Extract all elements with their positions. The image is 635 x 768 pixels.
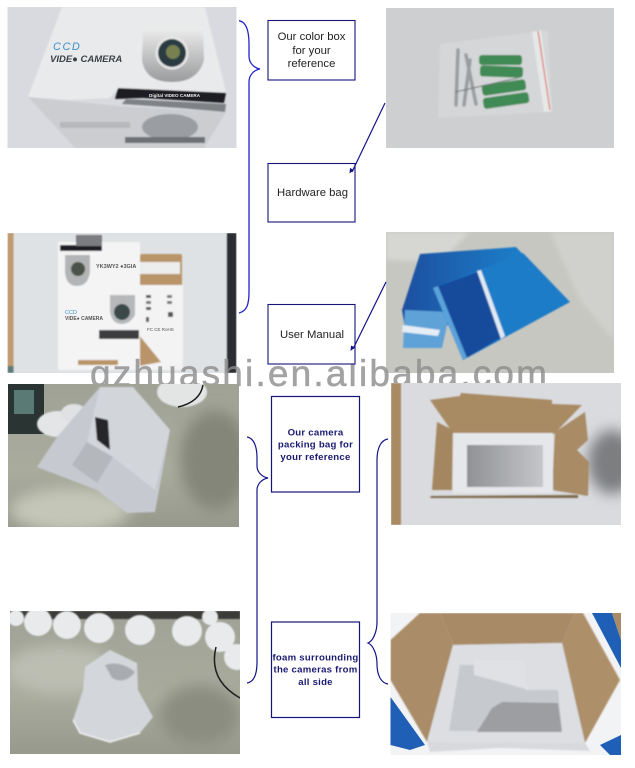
callout text: Hardware bag [277, 187, 348, 199]
photo: camera in packing bag [8, 384, 239, 527]
callout: user manual [268, 304, 355, 364]
callout: our color box [268, 20, 355, 80]
callout text: User Manual [280, 329, 344, 341]
photo: hardware bag [386, 8, 614, 148]
photo: carton with foam, long view [391, 383, 635, 525]
callout text: for your [292, 45, 331, 57]
callout text: all side [298, 677, 333, 688]
box label: digital video camera: Digital VIDEO CAMERA [149, 93, 201, 98]
callout text: foam surrounding [272, 652, 359, 664]
brace: color box and manuals [239, 21, 260, 313]
box label: CCD: CCD [53, 41, 81, 53]
carton mark: logo: CCD [65, 310, 77, 316]
carton mark: video camera: VIDE● CAMERA [65, 316, 103, 322]
callout text: your reference [280, 452, 351, 463]
callout text: packing bag for [278, 440, 353, 450]
photo: user manuals [386, 232, 614, 373]
carton mark: mirrored logo: YK3WY2 ●3GIA [96, 264, 136, 270]
brace: camera bag left [247, 437, 268, 683]
callout: foam surrounding [272, 622, 360, 718]
callout text: Our color box [278, 31, 346, 43]
photo: color box closed [8, 7, 236, 148]
photo: wrapped camera with white domes [5, 608, 250, 754]
callout text: reference [288, 58, 335, 70]
carton mark: certification: FC CE RoHS [147, 327, 174, 332]
arrow: hardware bag [350, 103, 385, 174]
brace: foam right [368, 439, 388, 684]
photo: color box unfolded [8, 233, 236, 373]
callout text: Our camera [288, 428, 344, 438]
callout: hardware bag [268, 164, 355, 222]
callout text: the cameras from [274, 664, 357, 676]
box label: video camera: VIDE● CAMERA [50, 54, 122, 65]
watermark: gzhuashi.en.alibaba.com [90, 353, 547, 394]
photo: carton with stepped foam [390, 613, 621, 755]
arrow: user manual [350, 282, 386, 351]
callout: camera packing bag [272, 396, 360, 492]
